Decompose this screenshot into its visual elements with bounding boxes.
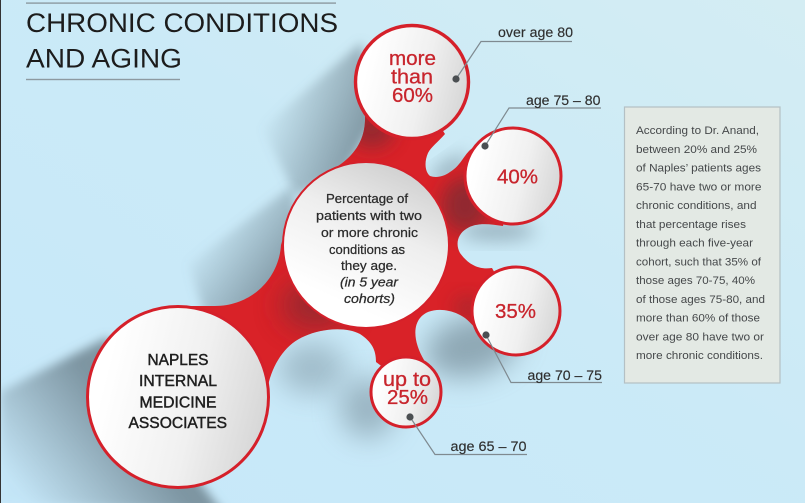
panel: explanatory note: more chronic conditions.: [636, 350, 763, 362]
circle: Naples Internal Medicine Associates: MEDICINE: [140, 394, 216, 412]
circle: central description: patients with two: [316, 209, 422, 223]
circle: top (more than 60%): 60%: [392, 84, 433, 107]
circle: top (more than 60%): more: [389, 47, 436, 70]
circle: up to 25%: [371, 357, 441, 427]
callout: over age 80: [452, 25, 573, 83]
circle: 40%: [465, 128, 561, 224]
panel: explanatory note: through each five-year: [636, 238, 753, 250]
panel: explanatory note: of Naples’ patients ages: [636, 162, 762, 174]
callout: age 65 – 70: age 65 – 70: [450, 439, 526, 454]
circle: Naples Internal Medicine Associates: [88, 306, 268, 488]
cast shadows: [0, 42, 535, 503]
circle: central description: (in 5 year: [340, 276, 399, 290]
callout: age 70 – 75: age 70 – 75: [528, 368, 602, 383]
panel: explanatory note: 65-70 have two or more: [636, 181, 762, 193]
panel: explanatory note: [624, 107, 780, 383]
circle: up to 25%: 25%: [387, 387, 428, 409]
circle: 40%: 40%: [497, 166, 538, 188]
panel: explanatory note: that percentage rises: [636, 219, 747, 231]
title: [26, 2, 338, 80]
callout: over age 80: over age 80: [498, 25, 573, 40]
circle: top (more than 60%): than: [391, 66, 433, 88]
title: CHRONIC CONDITIONS: [26, 8, 338, 38]
circle: central description: cohorts): [344, 292, 395, 306]
circle: 35%: [472, 267, 560, 355]
circle: Naples Internal Medicine Associates: ASSOCIATES: [128, 415, 227, 432]
panel: explanatory note: chronic conditions, and: [636, 200, 756, 212]
callout: age 75 – 80: age 75 – 80: [526, 93, 600, 108]
panel: explanatory note: more than 60% of those: [636, 312, 760, 324]
circle: Naples Internal Medicine Associates: INTERNAL: [139, 373, 217, 390]
panel: explanatory note: of those ages 75-80, and: [636, 294, 765, 306]
left edge bar: [0, 0, 1, 503]
circle: Naples Internal Medicine Associates: NAPLES: [148, 352, 208, 369]
circle: up to 25%: up to: [383, 369, 431, 391]
red connector network: [191, 116, 504, 383]
title: AND AGING: [26, 44, 182, 74]
panel: explanatory note: According to Dr. Anand,: [636, 125, 759, 137]
circle: central description: they age.: [341, 259, 397, 273]
panel: explanatory note: cohort, such that 35% of: [636, 256, 762, 268]
circle: 35%: 35%: [495, 300, 536, 323]
callout: age 65 – 70: [406, 413, 527, 454]
callout: age 75 – 80: [481, 93, 601, 150]
circle: central description: conditions as: [329, 243, 405, 257]
callout: age 70 – 75: [482, 331, 602, 383]
circle: central description: [283, 162, 449, 328]
panel: explanatory note: between 20% and 25%: [636, 144, 757, 156]
circle: top (more than 60%): [356, 26, 468, 138]
circle: central description: or more chronic: [321, 226, 418, 240]
panel: explanatory note: over age 80 have two or: [636, 331, 764, 343]
circle: central description: Percentage of: [326, 192, 409, 206]
panel: explanatory note: those ages 70-75, 40%: [636, 275, 755, 287]
